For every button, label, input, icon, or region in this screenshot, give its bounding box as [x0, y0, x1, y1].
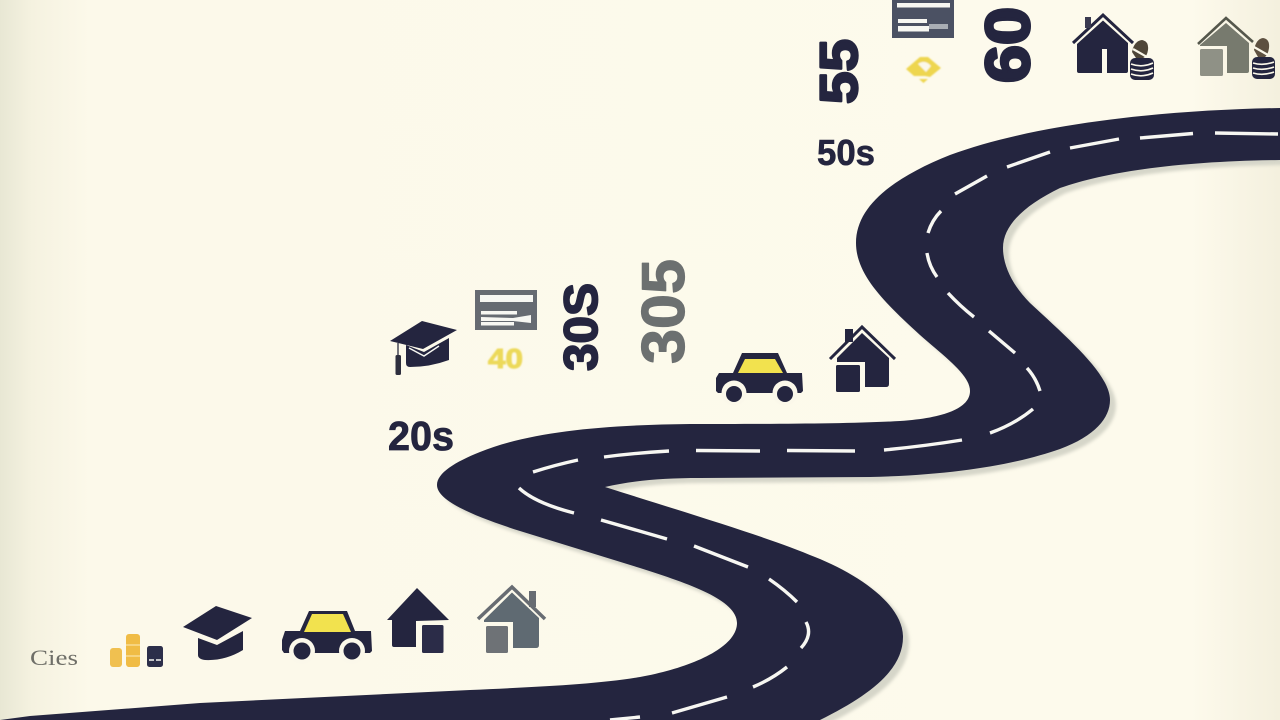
icon: yellow badge top — [906, 57, 941, 83]
icon: coin stack grey — [1252, 38, 1275, 79]
icon: grey house with coins — [1198, 18, 1275, 79]
rotated label: 55: 55 — [810, 39, 869, 104]
icon: yellow badge 40: 40 — [488, 343, 523, 374]
rotated label: 30S: 30S — [554, 283, 607, 371]
icon: car middle — [716, 353, 803, 406]
rotated label: 60: 60 — [974, 7, 1043, 83]
icon: navy house middle — [830, 327, 895, 392]
icon: graduation cap bottom — [183, 606, 252, 660]
icon: grey house bottom — [478, 587, 545, 653]
road centre dashes — [519, 133, 1278, 720]
label: Cies: Cies — [30, 645, 78, 670]
icon: certificate middle — [475, 290, 537, 330]
icon: coins stack — [110, 634, 163, 667]
label: 20s: 20s — [388, 413, 454, 459]
icon: navy house with coins — [1073, 15, 1154, 80]
icon: coin stack — [1130, 40, 1154, 80]
icon: navy house bottom — [387, 588, 449, 653]
icon: graduation cap middle — [390, 321, 457, 375]
icon: car bottom — [282, 611, 372, 664]
rotated label: 305: 305 — [630, 259, 697, 364]
label: 50s: 50s — [817, 132, 875, 173]
icon: certificate top — [892, 0, 954, 38]
